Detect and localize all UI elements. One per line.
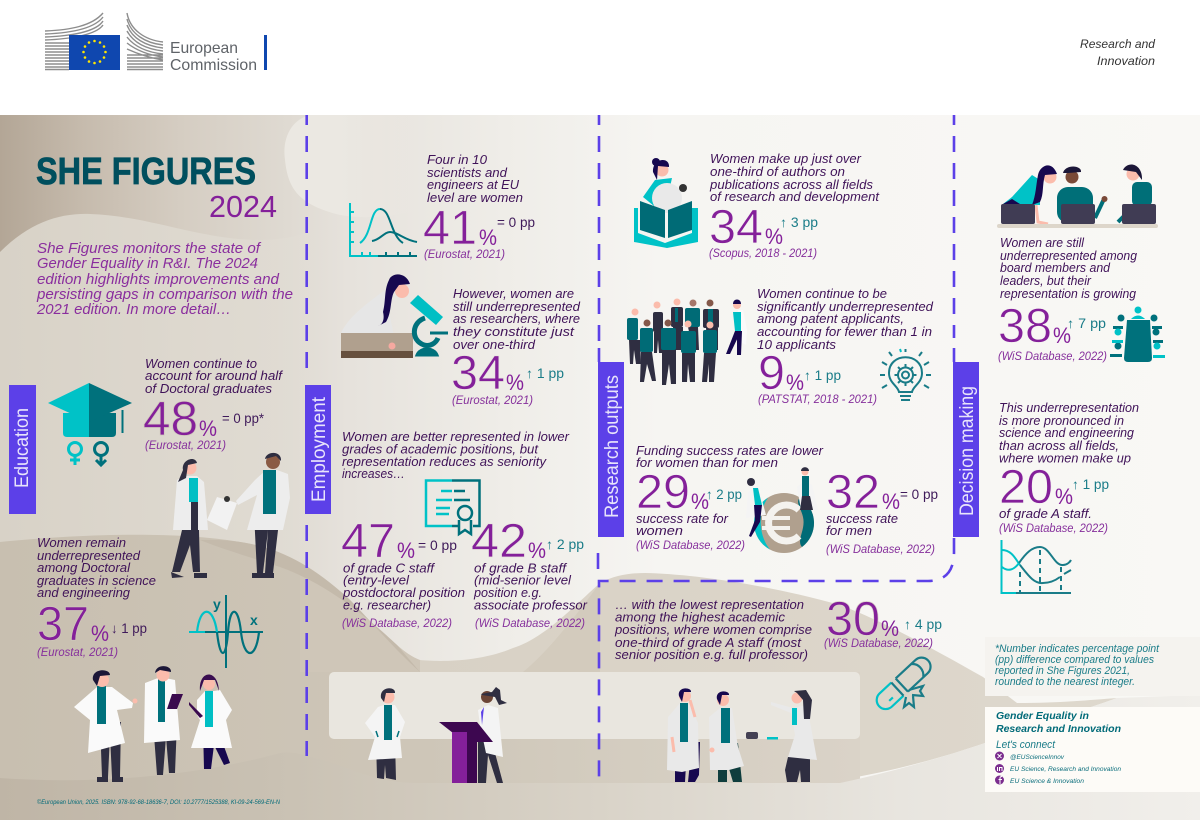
- stat: grade A science and engineering 20%: This underrepresentation: [999, 401, 1139, 415]
- tab: employment: [305, 385, 331, 514]
- department name: Research and: [1080, 37, 1155, 51]
- stat: highest academic positions 30%: positions, where women comprise: [614, 623, 812, 637]
- tab: decision making: [953, 362, 979, 537]
- stat: patent applicants 9%: ↑ 1 pp: [804, 368, 841, 383]
- icon: crossing curves chart: [1002, 540, 1071, 593]
- callout: footnote: reported in She Figures 2021,: [995, 665, 1130, 677]
- intro text: persisting gaps in comparison with the: [36, 286, 293, 303]
- title: She Figures 2024: SHE FIGURES: [36, 151, 256, 193]
- stat: grade C 47%: postdoctoral position: [342, 586, 465, 600]
- stat: women success rate 29%: [636, 466, 745, 552]
- stat: publications 34%: publications across all fields: [709, 178, 874, 192]
- intro text: 2021 edition. In more detail…: [36, 301, 231, 318]
- panel: contact links: @EUScienceInnov: [1010, 754, 1065, 761]
- stat: highest academic positions 30%: 30: [826, 593, 880, 646]
- stat: grade C 47%: (entry-level: [343, 574, 410, 588]
- stat: publications 34%: Women make up just over: [710, 152, 862, 166]
- icon: European Commission logo: [45, 13, 267, 74]
- stat: publications 34%: one-third of authors on: [710, 165, 845, 179]
- stat: patent applicants 9%: among patent applicants,: [757, 312, 904, 326]
- stat: researchers 34%: However, women are: [453, 287, 574, 301]
- stat: grade A science and engineering 20%: [999, 401, 1139, 535]
- stat: grade A science and engineering 20%: science and engineering: [999, 426, 1134, 440]
- illustration: woman at microscope: [341, 274, 448, 358]
- illustration: man and woman at podium: [365, 687, 507, 783]
- icon: lightbulb with gear: [880, 349, 931, 400]
- stat: patent applicants 9%: (PATSTAT, 2018 - 2021): [758, 394, 877, 406]
- panel: contact links: Let's connect: [996, 739, 1056, 751]
- stat: grade A science and engineering 20%: ↑ 1 pp: [1072, 477, 1109, 492]
- text: academic grades intro: Women are better represented in lower: [342, 430, 570, 444]
- stat: board members 38%: Women are still: [1000, 236, 1085, 250]
- stat: men success rate 32%: [826, 466, 938, 556]
- tab: decision making: Decision making: [957, 386, 978, 516]
- icon: sine wave graph: y: [213, 596, 221, 612]
- stat: publications 34%: %: [765, 224, 783, 249]
- stat: highest academic positions 30%: ↑ 4 pp: [904, 617, 942, 632]
- panel: decision making: [953, 165, 1200, 792]
- stat: grade C 47%: = 0 pp: [418, 538, 457, 553]
- stat: researchers 34%: ↑ 1 pp: [526, 366, 564, 381]
- title: She Figures 2024: [36, 151, 277, 224]
- stat: patent applicants 9%: 9: [758, 347, 785, 400]
- stat: doctoral graduates 48%: %: [199, 416, 217, 441]
- stat: scientists and engineers 41%: [423, 153, 535, 261]
- icon: woman reading book: [634, 158, 698, 248]
- tab: employment: Employment: [309, 396, 330, 502]
- intro text: [36, 240, 293, 318]
- text: academic grades intro: representation reduces as seniority: [342, 455, 547, 469]
- stat: researchers 34%: (Eurostat, 2021): [452, 395, 533, 407]
- panel: contact links: Gender Equality in: [996, 710, 1089, 722]
- stat: board members 38%: underrepresented among: [1000, 249, 1137, 263]
- stat: grade A science and engineering 20%: than across all fields,: [999, 439, 1119, 453]
- stat: patent applicants 9%: [757, 287, 934, 406]
- illustration: three scientists: [74, 666, 232, 782]
- stat: researchers 34%: they constitute just: [453, 325, 575, 339]
- icon: boardroom table: [1110, 306, 1165, 362]
- panel: contact links: EU Science, Research and Innovation: [1010, 766, 1121, 773]
- stat: patent applicants 9%: %: [786, 370, 804, 395]
- stat: researchers 34%: 34: [451, 347, 505, 400]
- stat: grade C 47%: %: [397, 538, 415, 563]
- illustration: two scientists with a document: [171, 453, 290, 578]
- stat: men success rate 32%: success rate: [826, 512, 898, 526]
- stat: patent applicants 9%: accounting for fewer than 1 in: [757, 325, 932, 339]
- stat: science and engineering 37%: (Eurostat, 2021): [37, 647, 118, 659]
- stat: researchers 34%: [451, 287, 581, 407]
- stat: grade C 47%: of grade C staff: [343, 562, 436, 576]
- stat: board members 38%: ↑ 7 pp: [1067, 316, 1106, 331]
- stat: women success rate 29%: (WiS Database, 2022): [636, 540, 745, 552]
- stat: publications 34%: ↑ 3 pp: [780, 215, 818, 230]
- callout: footnote: [985, 637, 1200, 696]
- stat: grade A science and engineering 20%: where women make up: [999, 452, 1131, 466]
- stat: doctoral graduates 48%: Women continue to: [145, 357, 257, 371]
- stat: science and engineering 37%: and engineering: [37, 586, 130, 600]
- stat: men success rate 32%: = 0 pp: [900, 487, 938, 502]
- stat: researchers 34%: %: [506, 370, 524, 395]
- panel: contact links: [985, 707, 1200, 792]
- stat: board members 38%: 38: [998, 300, 1052, 353]
- stat: board members 38%: (WiS Database, 2022): [998, 351, 1107, 363]
- stat: scientists and engineers 41%: scientists and: [427, 166, 508, 180]
- intro text: edition highlights improvements and: [37, 271, 280, 288]
- tab: research outputs: Research outputs: [602, 375, 623, 518]
- stat: science and engineering 37%: %: [91, 621, 109, 646]
- stat: board members 38%: %: [1053, 323, 1071, 348]
- stat: scientists and engineers 41%: 41: [423, 202, 477, 255]
- stat: publications 34%: (Scopus, 2018 - 2021): [709, 248, 817, 260]
- stat: women success rate 29%: success rate for: [636, 512, 729, 526]
- stat: highest academic positions 30%: senior position e.g. full professor): [615, 648, 808, 662]
- text: academic grades intro: grades of academic positions, but: [342, 442, 539, 456]
- title: She Figures 2024: 2024: [209, 189, 277, 224]
- illustration: crowd of applicants: [627, 298, 747, 385]
- stat: grade A science and engineering 20%: of grade A staff.: [999, 507, 1092, 521]
- stat: doctoral graduates 48%: = 0 pp*: [222, 411, 265, 426]
- stat: science and engineering 37%: Women remain: [37, 536, 126, 550]
- stat: grade B 42%: ↑ 2 pp: [546, 537, 584, 552]
- callout: footnote: (pp) difference compared to values: [995, 654, 1154, 666]
- icon: certificate: [426, 480, 480, 534]
- icon: diploma scroll: [873, 654, 934, 713]
- panel: contact links: Research and Innovation: [996, 723, 1121, 735]
- stat: researchers 34%: still underrepresented: [453, 300, 581, 314]
- stat: grade B 42%: [471, 515, 588, 630]
- stat: patent applicants 9%: 10 applicants: [757, 338, 837, 352]
- stat: publications 34%: of research and development: [710, 190, 880, 204]
- stat: highest academic positions 30%: … with the lowest representation: [615, 598, 804, 612]
- stat: grade C 47%: [341, 515, 465, 630]
- copyright line: ©European Union, 2025. ISBN: 978-92-68-18636-7, DOI: 10.2777/1525388, KI-09-24-569-EN-N: [37, 799, 281, 806]
- stat: highest academic positions 30%: (WiS Database, 2022): [824, 638, 933, 650]
- stat: researchers 34%: over one-third: [453, 338, 536, 352]
- stat: science and engineering 37%: among Doctoral: [37, 561, 131, 575]
- stat: grade B 42%: %: [528, 538, 546, 563]
- stat: highest academic positions 30%: one-third of grade A staff (most: [615, 636, 802, 650]
- panel: employment: [305, 153, 588, 783]
- stat: scientists and engineers 41%: (Eurostat, 2021): [424, 249, 505, 261]
- stat: science and engineering 37%: 37: [37, 598, 89, 651]
- stat: grade A science and engineering 20%: is more pronounced in: [999, 414, 1124, 428]
- text: academic grades intro: increases…: [342, 467, 405, 481]
- stat: doctoral graduates 48%: of Doctoral graduates: [145, 382, 273, 396]
- stat: grade B 42%: associate professor: [474, 598, 588, 612]
- stat: scientists and engineers 41%: Four in 10: [427, 153, 487, 167]
- stat: science and engineering 37%: graduates in science: [37, 574, 156, 588]
- icon: sine wave graph: x: [250, 612, 258, 628]
- icon: euro coin with two figures: [746, 467, 818, 553]
- stat: highest academic positions 30%: among the highest academic: [615, 610, 786, 624]
- stat: grade A science and engineering 20%: (WiS Database, 2022): [999, 523, 1108, 535]
- panel: floor band: [329, 672, 860, 739]
- stat: publications 34%: 34: [709, 201, 763, 254]
- illustration: three academics: [667, 688, 817, 782]
- department name: [1080, 37, 1155, 68]
- stat: men success rate 32%: %: [882, 489, 900, 514]
- tab: education: Education: [12, 408, 33, 488]
- stat: science and engineering 37%: [37, 536, 156, 659]
- text: funding success rates: Funding success rates are lower: [636, 444, 824, 458]
- stat: board members 38%: board members and: [1000, 261, 1111, 275]
- stat: grade C 47%: 47: [341, 515, 395, 568]
- icon: European Commission logo: European: [170, 40, 238, 57]
- stat: women success rate 29%: 29: [636, 466, 690, 519]
- text: funding success rates: for women than for men: [636, 456, 778, 470]
- stat: women success rate 29%: women: [636, 524, 683, 538]
- stat: grade B 42%: (mid-senior level: [474, 574, 572, 588]
- stat: men success rate 32%: for men: [826, 524, 872, 538]
- callout: footnote: rounded to the nearest integer.: [995, 676, 1135, 688]
- stat: women success rate 29%: ↑ 2 pp: [706, 487, 742, 502]
- stat: highest academic positions 30%: %: [881, 616, 899, 641]
- stat: board members 38%: [998, 236, 1137, 363]
- icon: European Commission logo: Commission: [170, 57, 257, 74]
- stat: board members 38%: leaders, but their: [1000, 274, 1092, 288]
- icon: sine wave graph: [189, 595, 263, 668]
- dashed section dividers: [307, 115, 954, 784]
- stat: scientists and engineers 41%: engineers at EU: [427, 178, 520, 192]
- stat: men success rate 32%: 32: [826, 466, 880, 519]
- stat: doctoral graduates 48%: (Eurostat, 2021): [145, 440, 226, 452]
- stat: grade B 42%: of grade B staff: [474, 562, 568, 576]
- panel: contact links: EU Science & Innovation: [1010, 778, 1084, 785]
- tab: education: [9, 385, 36, 514]
- stat: scientists and engineers 41%: %: [479, 225, 497, 250]
- stat: grade A science and engineering 20%: 20: [999, 461, 1053, 514]
- stat: researchers 34%: as researchers, where: [453, 312, 580, 326]
- header: logo and department: [0, 0, 1200, 115]
- stat: grade C 47%: (WiS Database, 2022): [342, 618, 452, 630]
- text: academic grades intro: [342, 430, 570, 481]
- stat: patent applicants 9%: Women continue to be: [757, 287, 887, 301]
- stat: scientists and engineers 41%: level are women: [427, 191, 523, 205]
- stat: doctoral graduates 48%: account for around half: [145, 369, 284, 383]
- stat: grade B 42%: (WiS Database, 2022): [475, 618, 585, 630]
- illustration: board meeting: [997, 165, 1158, 228]
- text: funding success rates: [636, 444, 824, 470]
- stat: patent applicants 9%: significantly underrepresented: [757, 300, 934, 314]
- stat: grade C 47%: e.g. researcher): [343, 598, 431, 612]
- stat: science and engineering 37%: underrepresented: [37, 549, 141, 563]
- intro text: Gender Equality in R&I. The 2024: [37, 255, 258, 272]
- tab: research outputs: [598, 362, 624, 537]
- stat: scientists and engineers 41%: = 0 pp: [497, 215, 535, 230]
- callout: footnote: *Number indicates percentage point: [995, 643, 1160, 655]
- stat: women success rate 29%: %: [691, 489, 709, 514]
- stat: grade B 42%: 42: [471, 515, 527, 568]
- department name: Innovation: [1097, 54, 1155, 68]
- stat: men success rate 32%: (WiS Database, 2022): [826, 544, 935, 556]
- stat: publications 34%: [709, 152, 880, 260]
- stat: doctoral graduates 48%: 48: [143, 393, 198, 446]
- stat: doctoral graduates 48%: [143, 357, 284, 452]
- icon: graduation cap with gender symbols: [48, 383, 132, 465]
- stat: grade B 42%: position e.g.: [473, 586, 542, 600]
- stat: highest academic positions 30%: [614, 593, 942, 662]
- stat: grade A science and engineering 20%: %: [1055, 484, 1073, 509]
- stat: board members 38%: representation is growing: [1000, 287, 1136, 301]
- stat: science and engineering 37%: ↓ 1 pp: [111, 621, 147, 636]
- intro text: She Figures monitors the state of: [37, 240, 262, 257]
- panel: research outputs: [598, 152, 942, 782]
- panel: education: [9, 357, 290, 782]
- icon: distribution chart: [350, 203, 417, 256]
